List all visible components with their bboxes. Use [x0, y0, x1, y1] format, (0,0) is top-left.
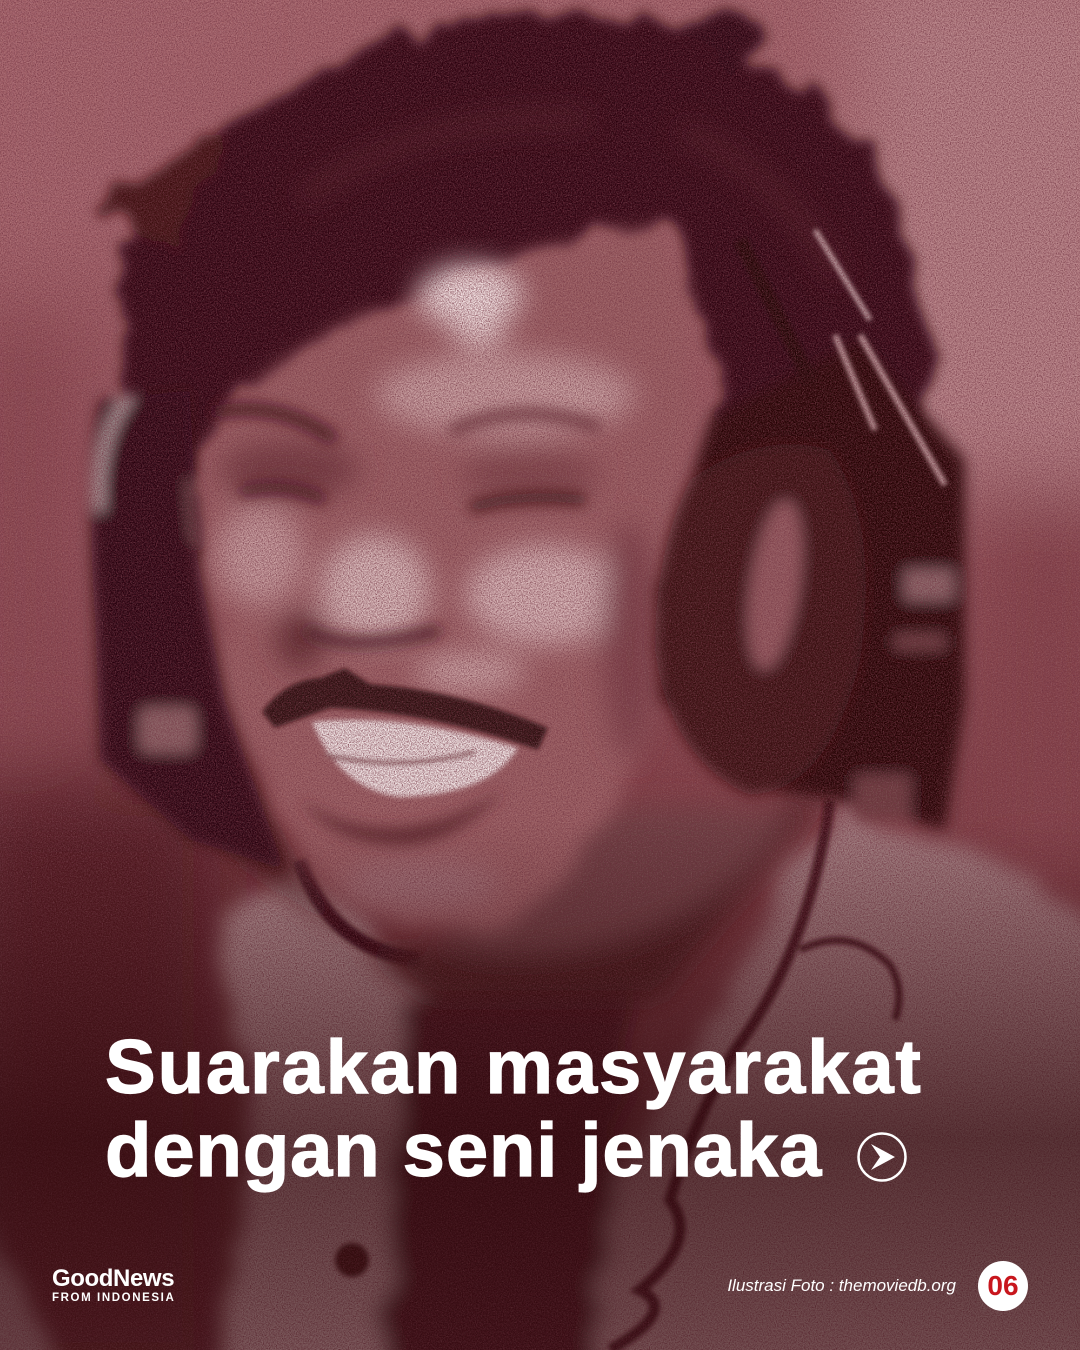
title: [105, 1025, 923, 1193]
eyes, nose and mouth: [215, 409, 600, 845]
headphones: [91, 340, 965, 870]
teeth: [312, 720, 518, 797]
bottom dark gradient: [0, 820, 1080, 1350]
face: [205, 225, 694, 933]
neck and jaw shadow: [230, 760, 830, 1000]
moustache: [262, 668, 548, 750]
hair: [90, 16, 930, 580]
page number badge: 06: [987, 1270, 1019, 1301]
title: dengan seni jenaka: [105, 1108, 822, 1193]
photo credit: Ilustrasi Foto : themoviedb.org: [727, 1276, 956, 1295]
hair highlights: [300, 119, 840, 280]
facial highlights: [216, 353, 658, 909]
icon: next arrow: [857, 1132, 907, 1182]
shirt: [0, 800, 1080, 1350]
forehead shine: [418, 263, 522, 351]
logo: GoodNews from Indonesia: GoodNews: [52, 1265, 174, 1292]
logo: GoodNews from Indonesia: [52, 1265, 175, 1304]
title: Suarakan masyarakat: [105, 1025, 923, 1110]
logo: GoodNews from Indonesia: FROM INDONESIA: [52, 1292, 175, 1304]
page number badge: [978, 1261, 1028, 1311]
